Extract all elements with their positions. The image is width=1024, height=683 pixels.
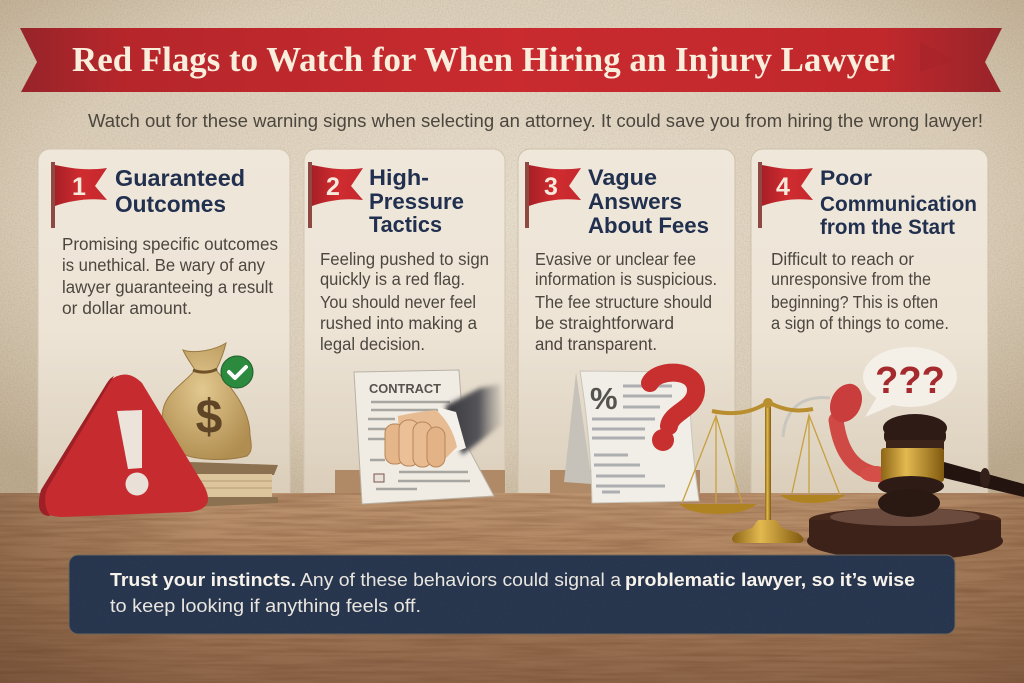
wood table bbox=[0, 470, 1024, 683]
body 2: You should never feel bbox=[320, 292, 476, 312]
icon: phone cord bbox=[783, 398, 830, 437]
question marks: ??? bbox=[875, 360, 945, 402]
flag 2: 2 bbox=[326, 173, 340, 201]
body 4: beginning? This is often bbox=[771, 292, 938, 312]
footer text: problematic lawyer, so it’s wise bbox=[625, 569, 915, 590]
panel: card 2 background bbox=[304, 149, 505, 509]
footer text: to keep looking if anything feels off. bbox=[110, 595, 421, 616]
heading 3: About Fees bbox=[588, 213, 709, 238]
heading 4: from the Start bbox=[820, 216, 955, 239]
body 3: Evasive or unclear fee bbox=[535, 249, 696, 269]
heading 3: Answers bbox=[588, 189, 682, 214]
icon: book bbox=[190, 462, 278, 507]
icon: money bag bbox=[162, 343, 251, 459]
icon: percent document bbox=[564, 371, 699, 503]
dollar sign: $ bbox=[196, 391, 223, 444]
heading 2: Tactics bbox=[369, 212, 442, 237]
exclamation mark bbox=[117, 410, 142, 469]
banner flag watermark bbox=[920, 42, 955, 72]
heading 4: Poor bbox=[820, 167, 872, 190]
body 3: and transparent. bbox=[535, 334, 657, 354]
item 1 content bbox=[51, 162, 278, 318]
icon: fist and cuff bbox=[385, 407, 466, 467]
body 2: rushed into making a bbox=[320, 313, 477, 333]
body 1: lawyer guaranteeing a result bbox=[62, 277, 273, 297]
gavel handle bbox=[944, 462, 1024, 497]
flag 2 bbox=[308, 162, 363, 228]
panel: card 1 background bbox=[38, 149, 290, 509]
heading 2: Pressure bbox=[369, 189, 464, 214]
footer text: Any of these behaviors could signal a bbox=[300, 569, 622, 590]
body 3: The fee structure should bbox=[535, 292, 712, 312]
panel: card 4 background bbox=[751, 149, 988, 509]
percent sign: % bbox=[590, 381, 618, 416]
item 3 content bbox=[525, 162, 717, 354]
body 2: legal decision. bbox=[320, 334, 425, 354]
heading 1: Outcomes bbox=[115, 191, 226, 217]
icon: scales of justice bbox=[679, 398, 845, 543]
flag 1 bbox=[51, 162, 107, 228]
item 2 content bbox=[308, 162, 489, 354]
body 4: Difficult to reach or bbox=[771, 249, 914, 269]
body 2: quickly is a red flag. bbox=[320, 269, 465, 289]
icon: contract under fist bbox=[354, 370, 494, 504]
footer text: Trust your instincts. bbox=[110, 569, 296, 590]
icon: gavel bbox=[807, 414, 1024, 560]
body 4: unresponsive from the bbox=[771, 269, 931, 289]
body 1: is unethical. Be wary of any bbox=[62, 255, 265, 275]
flag 4: 4 bbox=[776, 173, 790, 201]
body 3: information is suspicious. bbox=[535, 269, 717, 289]
icon: red question mark bbox=[650, 373, 696, 451]
flag 3: 3 bbox=[544, 173, 558, 201]
body 1: Promising specific outcomes bbox=[62, 234, 278, 254]
icon: red telephone handset bbox=[824, 379, 890, 482]
icon: warning triangle bbox=[39, 374, 208, 517]
heading 2: High- bbox=[369, 165, 429, 190]
icon: green check badge bbox=[221, 356, 253, 388]
body 2: Feeling pushed to sign bbox=[320, 249, 489, 269]
flag 3 bbox=[525, 162, 581, 228]
heading 4: Communication bbox=[820, 193, 977, 216]
title: Red Flags to Watch for When Hiring an Injury Lawyer bbox=[72, 40, 895, 79]
body 1: or dollar amount. bbox=[62, 298, 192, 318]
icon: suit sleeve bbox=[445, 384, 502, 455]
subtitle: Watch out for these warning signs when selecting an attorney. It could save you from hiring the wrong lawyer! bbox=[88, 110, 983, 131]
parchment background bbox=[0, 0, 1024, 500]
gavel block bbox=[807, 508, 1003, 560]
contract label: CONTRACT bbox=[369, 381, 441, 396]
flag 4 bbox=[758, 162, 813, 228]
item 4 content bbox=[758, 162, 977, 333]
panel: card 3 background bbox=[518, 149, 735, 509]
title banner bbox=[20, 28, 1002, 92]
heading 3: Vague bbox=[588, 165, 657, 190]
gavel head bbox=[878, 414, 947, 517]
body 4: a sign of things to come. bbox=[771, 313, 949, 333]
speech bubble bbox=[863, 347, 957, 417]
body 3: be straightforward bbox=[535, 313, 674, 333]
heading 1: Guaranteed bbox=[115, 165, 245, 191]
flag 1: 1 bbox=[72, 173, 86, 201]
callout: footer bbox=[69, 555, 955, 634]
